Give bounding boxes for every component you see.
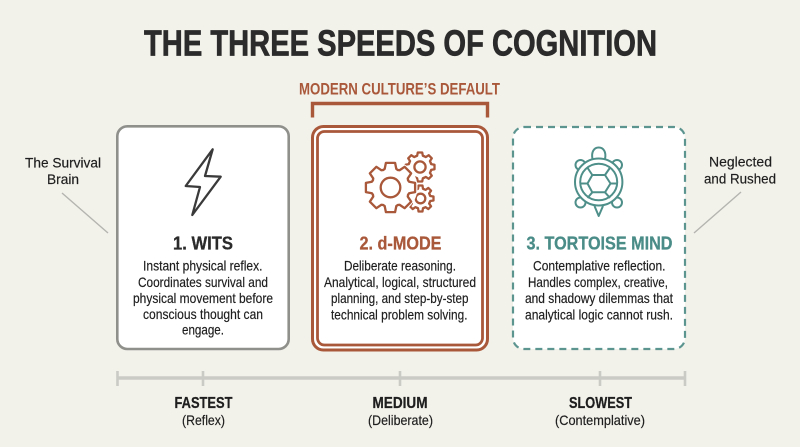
text: tortoise mind description: analytical logic cannot rush. (525, 306, 673, 322)
text: wits description: Instant physical reflex. (143, 258, 262, 274)
label: slowest: (Contemplative) (555, 412, 645, 428)
label: medium (368, 395, 433, 428)
text: tortoise mind description: and shadowy dilemmas that (525, 290, 673, 306)
callout: modern culture's default: MODERN CULTURE’S DEFAULT (299, 80, 500, 98)
heading: tortoise mind: 3. TORTOISE MIND (526, 234, 672, 254)
label: slowest (555, 395, 645, 428)
panel: d-mode (312, 126, 488, 350)
annotation: the survival brain (25, 154, 108, 233)
icon: tortoise (575, 148, 622, 216)
text: d-mode description: Deliberate reasoning. (344, 258, 456, 274)
label: fastest (174, 395, 233, 428)
label: medium: (Deliberate) (368, 412, 433, 428)
label: slowest: SLOWEST (569, 395, 632, 412)
panel: wits (117, 126, 289, 349)
label: medium: MEDIUM (372, 395, 428, 412)
text: wits description: engage. (182, 322, 224, 338)
text: wits description: conscious thought can (143, 306, 263, 322)
heading: wits: 1. WITS (173, 234, 233, 254)
annotation: neglected and rushed: Neglected (709, 154, 772, 170)
text: d-mode description: technical problem solving. (331, 306, 468, 322)
annotation: neglected and rushed (694, 154, 776, 233)
title: THE THREE SPEEDS OF COGNITION (144, 22, 657, 64)
text: d-mode description: Analytical, logical, structured (324, 274, 476, 290)
text: tortoise mind description: Contemplative reflection. (533, 258, 666, 274)
text: wits description: physical movement before (133, 290, 273, 306)
bracket (312, 104, 488, 118)
callout: modern culture's default (299, 80, 500, 118)
text: wits description: Coordinates survival and (138, 274, 268, 290)
speed timeline (118, 371, 685, 386)
annotation: the survival brain: Brain (47, 171, 79, 187)
heading: d-mode: 2. d-MODE (360, 234, 442, 254)
label: fastest: FASTEST (174, 395, 233, 412)
label: fastest: (Reflex) (182, 412, 225, 428)
icon: lightning bolt (186, 149, 221, 215)
annotation: neglected and rushed: and Rushed (704, 170, 776, 186)
text: wits description (133, 258, 273, 338)
text: d-mode description (324, 258, 476, 322)
annotation: the survival brain: The Survival (25, 154, 101, 170)
panel: tortoise mind (513, 127, 685, 349)
text: tortoise mind description: Handles complex, creative, (528, 274, 668, 290)
text: tortoise mind description (525, 258, 673, 322)
text: d-mode description: planning, and step-by-step (331, 290, 469, 306)
icon: gears (364, 152, 434, 214)
